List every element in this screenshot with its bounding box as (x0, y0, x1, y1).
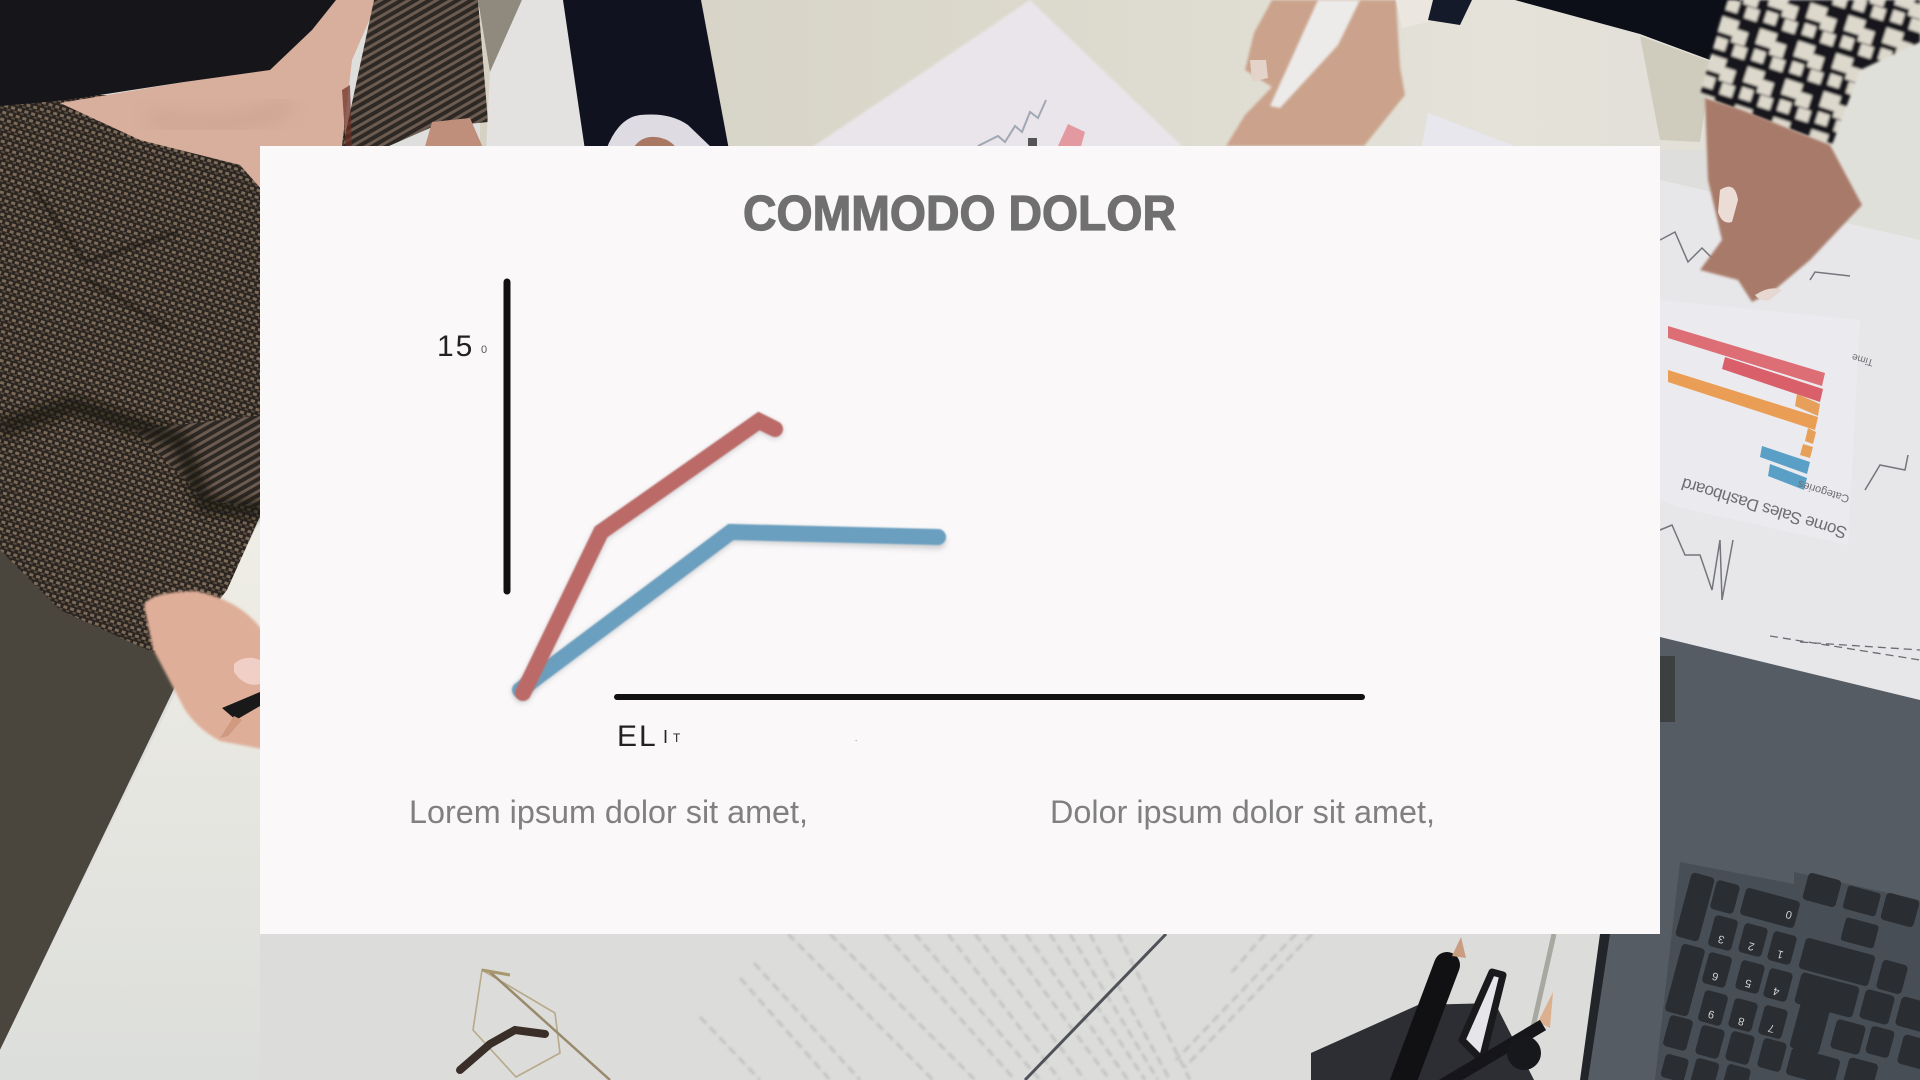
upper right table (1800, 40, 1920, 450)
seated person's lower hand (144, 591, 262, 749)
x axis label (617, 720, 857, 753)
dashboard card: Time (1850, 351, 1875, 368)
right hand (1700, 98, 1862, 302)
dashboard card: Some Sales Dashboard (1679, 474, 1849, 542)
hair (0, 0, 336, 106)
text block: left caption: Lorem ipsum dolor sit amet, (409, 794, 808, 830)
shirt cuff (606, 114, 714, 150)
printed text columns on paper (700, 934, 1312, 1080)
caption dashes (1770, 636, 1920, 660)
seated person's jacket (0, 95, 345, 660)
seated person's upper hand (424, 118, 484, 150)
keyboard: 9 (1707, 1007, 1716, 1020)
text block: right caption: Dolor ipsum dolor sit amet, (1050, 794, 1435, 830)
hand behind cuff (632, 137, 678, 150)
centre paper (808, 0, 1186, 150)
keyboard: 3 (1717, 932, 1726, 945)
wall area (486, 0, 585, 150)
x axis label: . (855, 734, 857, 743)
x axis (617, 694, 1362, 700)
laptop body (1583, 637, 1920, 1080)
title: COMMODO DOLOR (743, 187, 1176, 241)
keyboard (1655, 862, 1920, 1080)
jacket shoulder (342, 0, 488, 150)
floor (0, 500, 265, 1050)
thumb nail (1250, 60, 1268, 82)
x axis label: T (673, 731, 681, 745)
line chart (437, 282, 1362, 753)
beige table beside hand (1640, 36, 1712, 142)
grey sleeve edge (478, 0, 522, 72)
keyboard: 8 (1737, 1014, 1746, 1027)
writing hand (1226, 0, 1405, 146)
white pen (1270, 0, 1360, 108)
red series (523, 421, 775, 695)
table top strip (480, 0, 1920, 150)
x axis label: EL (617, 720, 658, 753)
houndstooth sleeve (1700, 0, 1920, 145)
y axis (504, 282, 510, 591)
keyboard: 2 (1747, 939, 1756, 952)
desk edge (1529, 934, 1554, 1045)
y axis label: 15 (437, 330, 474, 363)
keyboard: 0 (1785, 908, 1794, 921)
laptop vent (1580, 934, 1610, 1080)
small paper (1421, 113, 1525, 150)
laptop sticker (1660, 656, 1675, 722)
navy cuff right (1428, 0, 1472, 25)
shirt cuff right (1396, 0, 1433, 28)
table lower left (0, 510, 265, 1080)
x axis label: I (663, 727, 668, 747)
keyboard: 5 (1744, 976, 1753, 989)
blue series (520, 532, 938, 691)
keyboard: 4 (1772, 984, 1781, 997)
dark clothing top right (1515, 0, 1740, 60)
neck shading (150, 105, 290, 124)
sales paper (1660, 180, 1920, 700)
glasses (460, 970, 610, 1080)
keyboard: 6 (1711, 969, 1720, 982)
lower table region (260, 930, 1610, 1080)
line charts on paper (1660, 232, 1908, 600)
dashboard card (1660, 300, 1875, 545)
face and neck (60, 0, 378, 190)
y axis label: 0 (481, 344, 487, 356)
dashboard card: Categories (1796, 477, 1851, 505)
pen holder (1311, 937, 1553, 1080)
red collar shadow (342, 85, 352, 150)
keyboard: 1 (1776, 947, 1785, 960)
keyboard: 7 (1767, 1021, 1776, 1034)
navy sleeve (563, 0, 729, 150)
panel: chart card (260, 146, 1660, 934)
diagonal ruled line (1025, 934, 1166, 1080)
